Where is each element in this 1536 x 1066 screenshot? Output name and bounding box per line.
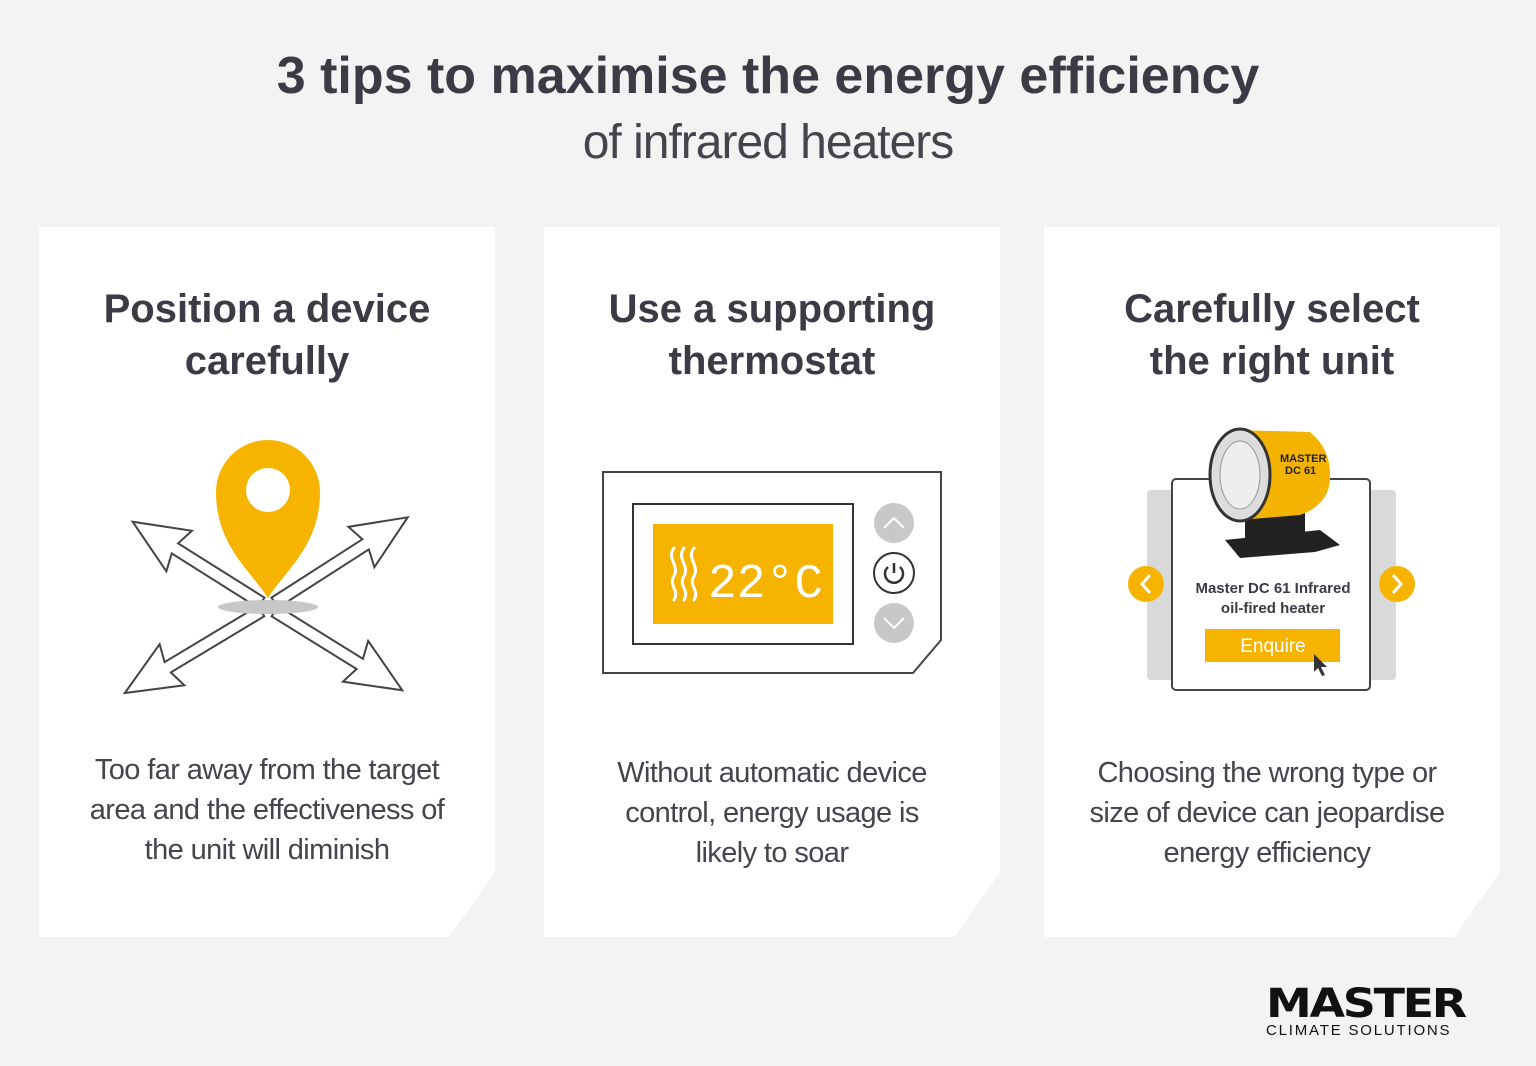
heading (1126, 293, 1420, 382)
heading: Position a device (104, 287, 430, 331)
text: Too far away from the target area and the effectiveness of the unit will diminish (90, 754, 444, 866)
icon: thermostat (602, 471, 942, 674)
heading: the right unit (1150, 339, 1394, 383)
heading: Use a supporting (609, 287, 935, 331)
heading (106, 293, 429, 382)
icon: thermostat: 22°C (708, 558, 823, 612)
panel: thermostat (544, 227, 1000, 937)
text: Choosing the wrong type or size of device can jeopardise energy efficiency (1090, 757, 1444, 869)
icon: pin with arrows (122, 440, 410, 694)
icon: product carousel (1128, 428, 1415, 691)
icon: product carousel: oil-fired heater (1221, 600, 1325, 617)
heading: thermostat (669, 339, 875, 383)
text: Without automatic device control, energy usage is likely to soar (617, 757, 927, 869)
heading (611, 293, 933, 374)
logo: CLIMATE SOLUTIONS (1266, 1022, 1451, 1039)
title: 3 tips to maximise the energy efficiency (277, 47, 1259, 105)
icon: product carousel: MASTER (1280, 453, 1326, 465)
title: of infrared heaters (583, 116, 953, 169)
icon: product carousel: DC 61 (1285, 465, 1316, 477)
panel: position (39, 227, 495, 937)
icon: product carousel: Enquire (1240, 636, 1306, 657)
panel: select unit (1044, 227, 1500, 937)
title (277, 47, 1259, 169)
heading: carefully (185, 339, 349, 383)
heading: Carefully select (1124, 287, 1420, 331)
logo: MASTER (1266, 981, 1465, 1027)
icon: product carousel: Master DC 61 Infrared (1195, 580, 1351, 597)
